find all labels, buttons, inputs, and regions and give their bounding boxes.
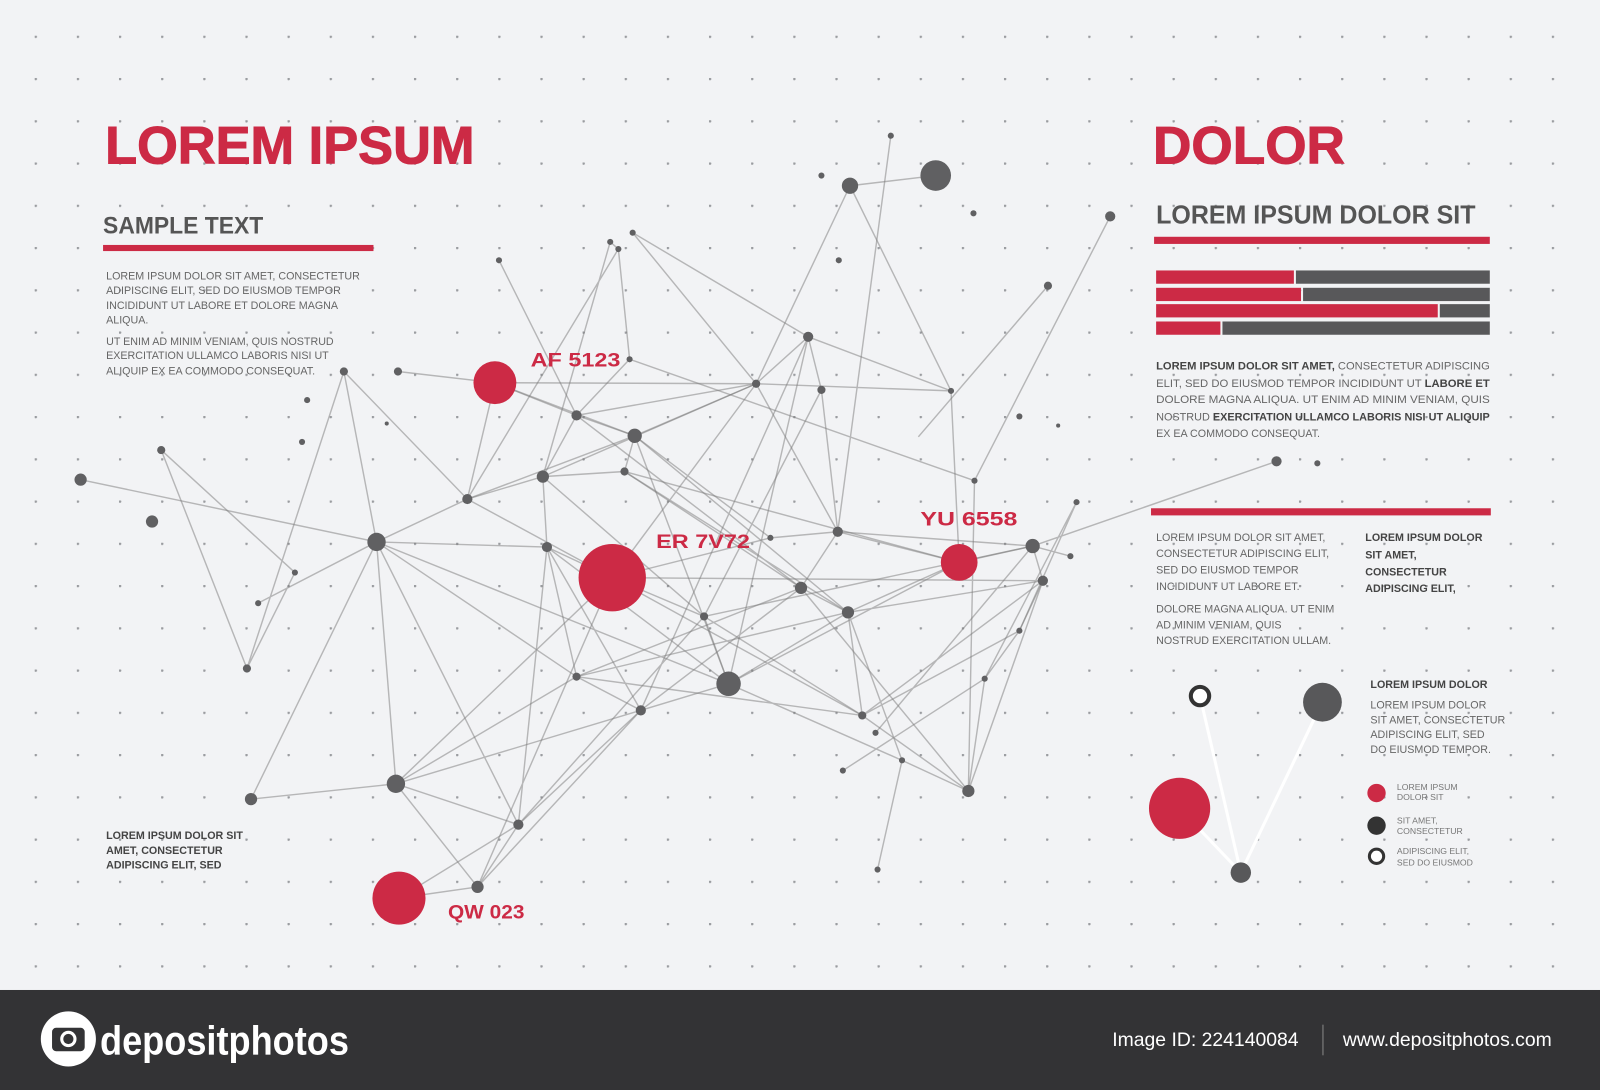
text block: INCIDIDUNT UT LABORE ET DOLORE MAGNA	[106, 300, 339, 312]
text block: LOREM IPSUM DOLOR SIT AMET, CONSECTETUR ADIPISCING	[1156, 360, 1490, 372]
legend: LOREM IPSUM	[1397, 782, 1458, 792]
title: LOREM IPSUM	[105, 116, 474, 175]
bottom note: AMET, CONSECTETUR	[106, 845, 223, 857]
text block: DOLORE MAGNA ALIQUA. UT ENIM AD MINIM VENIAM, QUIS	[1156, 394, 1490, 406]
legend: ADIPISCING ELIT,	[1397, 846, 1469, 856]
icon: logo	[41, 1011, 96, 1067]
legend: CONSECTETUR	[1397, 826, 1463, 836]
description	[1370, 679, 1505, 756]
subheading: SAMPLE TEXT	[103, 213, 263, 240]
text block: NOSTRUD EXERCITATION ULLAMCO LABORIS NISI UT ALIQUIP	[1156, 411, 1490, 423]
text block: ADIPISCING ELIT, SED DO EIUSMOD TEMPOR	[106, 285, 341, 297]
title: DOLOR	[1153, 116, 1345, 175]
right panel: CONSECTETUR	[1365, 567, 1447, 579]
text block: ALIQUIP EX EA COMMODO CONSEQUAT.	[106, 366, 315, 378]
description: ADIPISCING ELIT, SED	[1370, 729, 1485, 741]
bottom note: LOREM IPSUM DOLOR SIT	[106, 830, 243, 842]
network graph	[74, 133, 1320, 925]
legend: DOLOR SIT	[1397, 792, 1444, 802]
two columns: INCIDIDUNT UT LABORE ET.	[1156, 581, 1300, 593]
two columns	[1156, 532, 1334, 647]
two columns: DOLORE MAGNA ALIQUA. UT ENIM	[1156, 603, 1334, 615]
two columns: AD MINIM VENIAM, QUIS	[1156, 620, 1282, 632]
text block: LOREM IPSUM DOLOR SIT AMET, CONSECTETUR	[106, 271, 360, 283]
text block	[1156, 360, 1490, 440]
description: SIT AMET, CONSECTETUR	[1370, 715, 1505, 727]
right panel	[1149, 116, 1505, 883]
text block: ALIQUA.	[106, 315, 148, 327]
footer	[0, 990, 1600, 1090]
right panel: SIT AMET,	[1365, 549, 1417, 561]
footer: Image ID: 224140084	[1112, 1029, 1299, 1051]
bottom note	[106, 830, 243, 872]
legend: SIT AMET,	[1397, 816, 1438, 826]
text block: ELIT, SED DO EIUSMOD TEMPOR INCIDIDUNT UT LABORE ET	[1156, 378, 1490, 390]
node labels	[448, 349, 1018, 924]
right panel: ADIPISCING ELIT,	[1365, 583, 1456, 595]
subheading: LOREM IPSUM DOLOR SIT	[1156, 202, 1476, 230]
description: DO EIUSMOD TEMPOR.	[1370, 744, 1491, 756]
two columns: SED DO EIUSMOD TEMPOR	[1156, 565, 1299, 577]
text block	[106, 271, 360, 378]
two columns: CONSECTETUR ADIPISCING ELIT,	[1156, 548, 1329, 560]
text block: EXERCITATION ULLAMCO LABORIS NISI UT	[106, 350, 329, 362]
right panel: LOREM IPSUM DOLOR	[1365, 532, 1483, 544]
footer: depositphotos	[100, 1017, 349, 1063]
text block: UT ENIM AD MINIM VENIAM, QUIS NOSTRUD	[106, 336, 334, 348]
description: LOREM IPSUM DOLOR	[1370, 699, 1487, 711]
description: LOREM IPSUM DOLOR	[1370, 679, 1488, 691]
mini graph	[1149, 683, 1342, 883]
two columns: NOSTRUD EXERCITATION ULLAM.	[1156, 635, 1331, 647]
node labels: AF 5123	[531, 349, 621, 371]
legend: SED DO EIUSMOD	[1397, 857, 1473, 867]
node labels: ER 7V72	[656, 531, 750, 553]
left panel	[103, 116, 474, 872]
legend	[1367, 782, 1473, 867]
bar chart	[1156, 270, 1490, 335]
node labels: QW 023	[448, 902, 525, 924]
text block: EX EA COMMODO CONSEQUAT.	[1156, 428, 1320, 440]
node labels: YU 6558	[920, 509, 1018, 531]
footer: www.depositphotos.com	[1342, 1029, 1552, 1051]
bottom note: ADIPISCING ELIT, SED	[106, 860, 222, 872]
two columns: LOREM IPSUM DOLOR SIT AMET,	[1156, 532, 1325, 544]
